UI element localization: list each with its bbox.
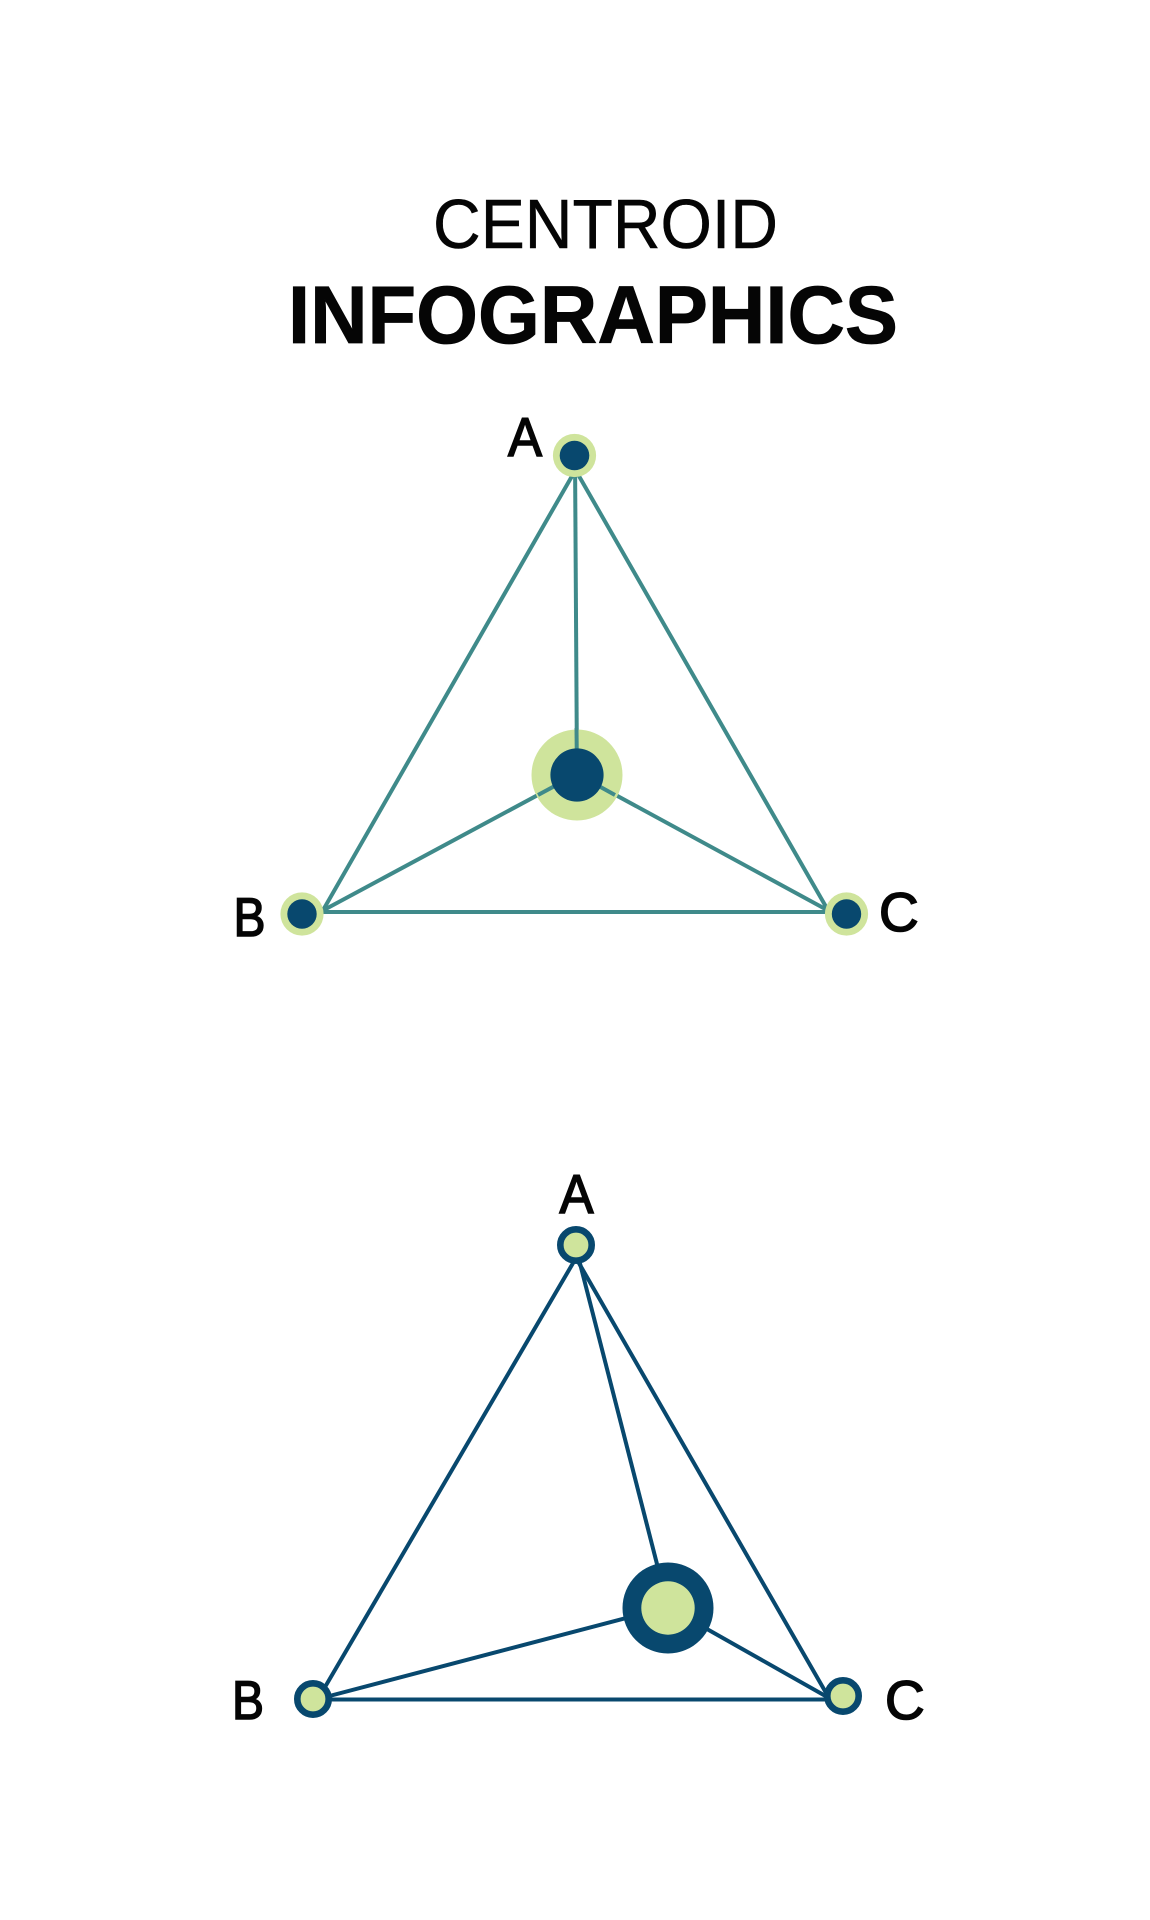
vertex C — [825, 892, 868, 936]
vertex C — [827, 1680, 859, 1712]
diagram: centroid at centre of triangle — [234, 406, 919, 948]
vertex B — [297, 1683, 329, 1715]
vertex A — [553, 434, 596, 477]
vertex A — [560, 1229, 592, 1261]
label B: B — [234, 886, 266, 948]
label A: A — [508, 406, 542, 468]
title line: INFOGRAPHICS: INFOGRAPHICS — [288, 270, 898, 361]
centroid lines over halo — [538, 728, 615, 795]
label B: B — [232, 1669, 264, 1731]
title — [288, 185, 898, 361]
vertex B — [280, 892, 324, 936]
label C: C — [885, 1669, 925, 1731]
triangle edges and medians — [322, 455, 829, 912]
centroid dot — [550, 748, 604, 802]
centroid outer halo — [532, 730, 622, 820]
centroid node — [622, 1562, 714, 1654]
label C: C — [879, 881, 919, 943]
diagram: centroid offset within triangle — [232, 1163, 925, 1731]
triangle edges and connectors — [318, 1244, 838, 1700]
title line: CENTROID: CENTROID — [433, 185, 778, 263]
label A: A — [560, 1163, 594, 1225]
